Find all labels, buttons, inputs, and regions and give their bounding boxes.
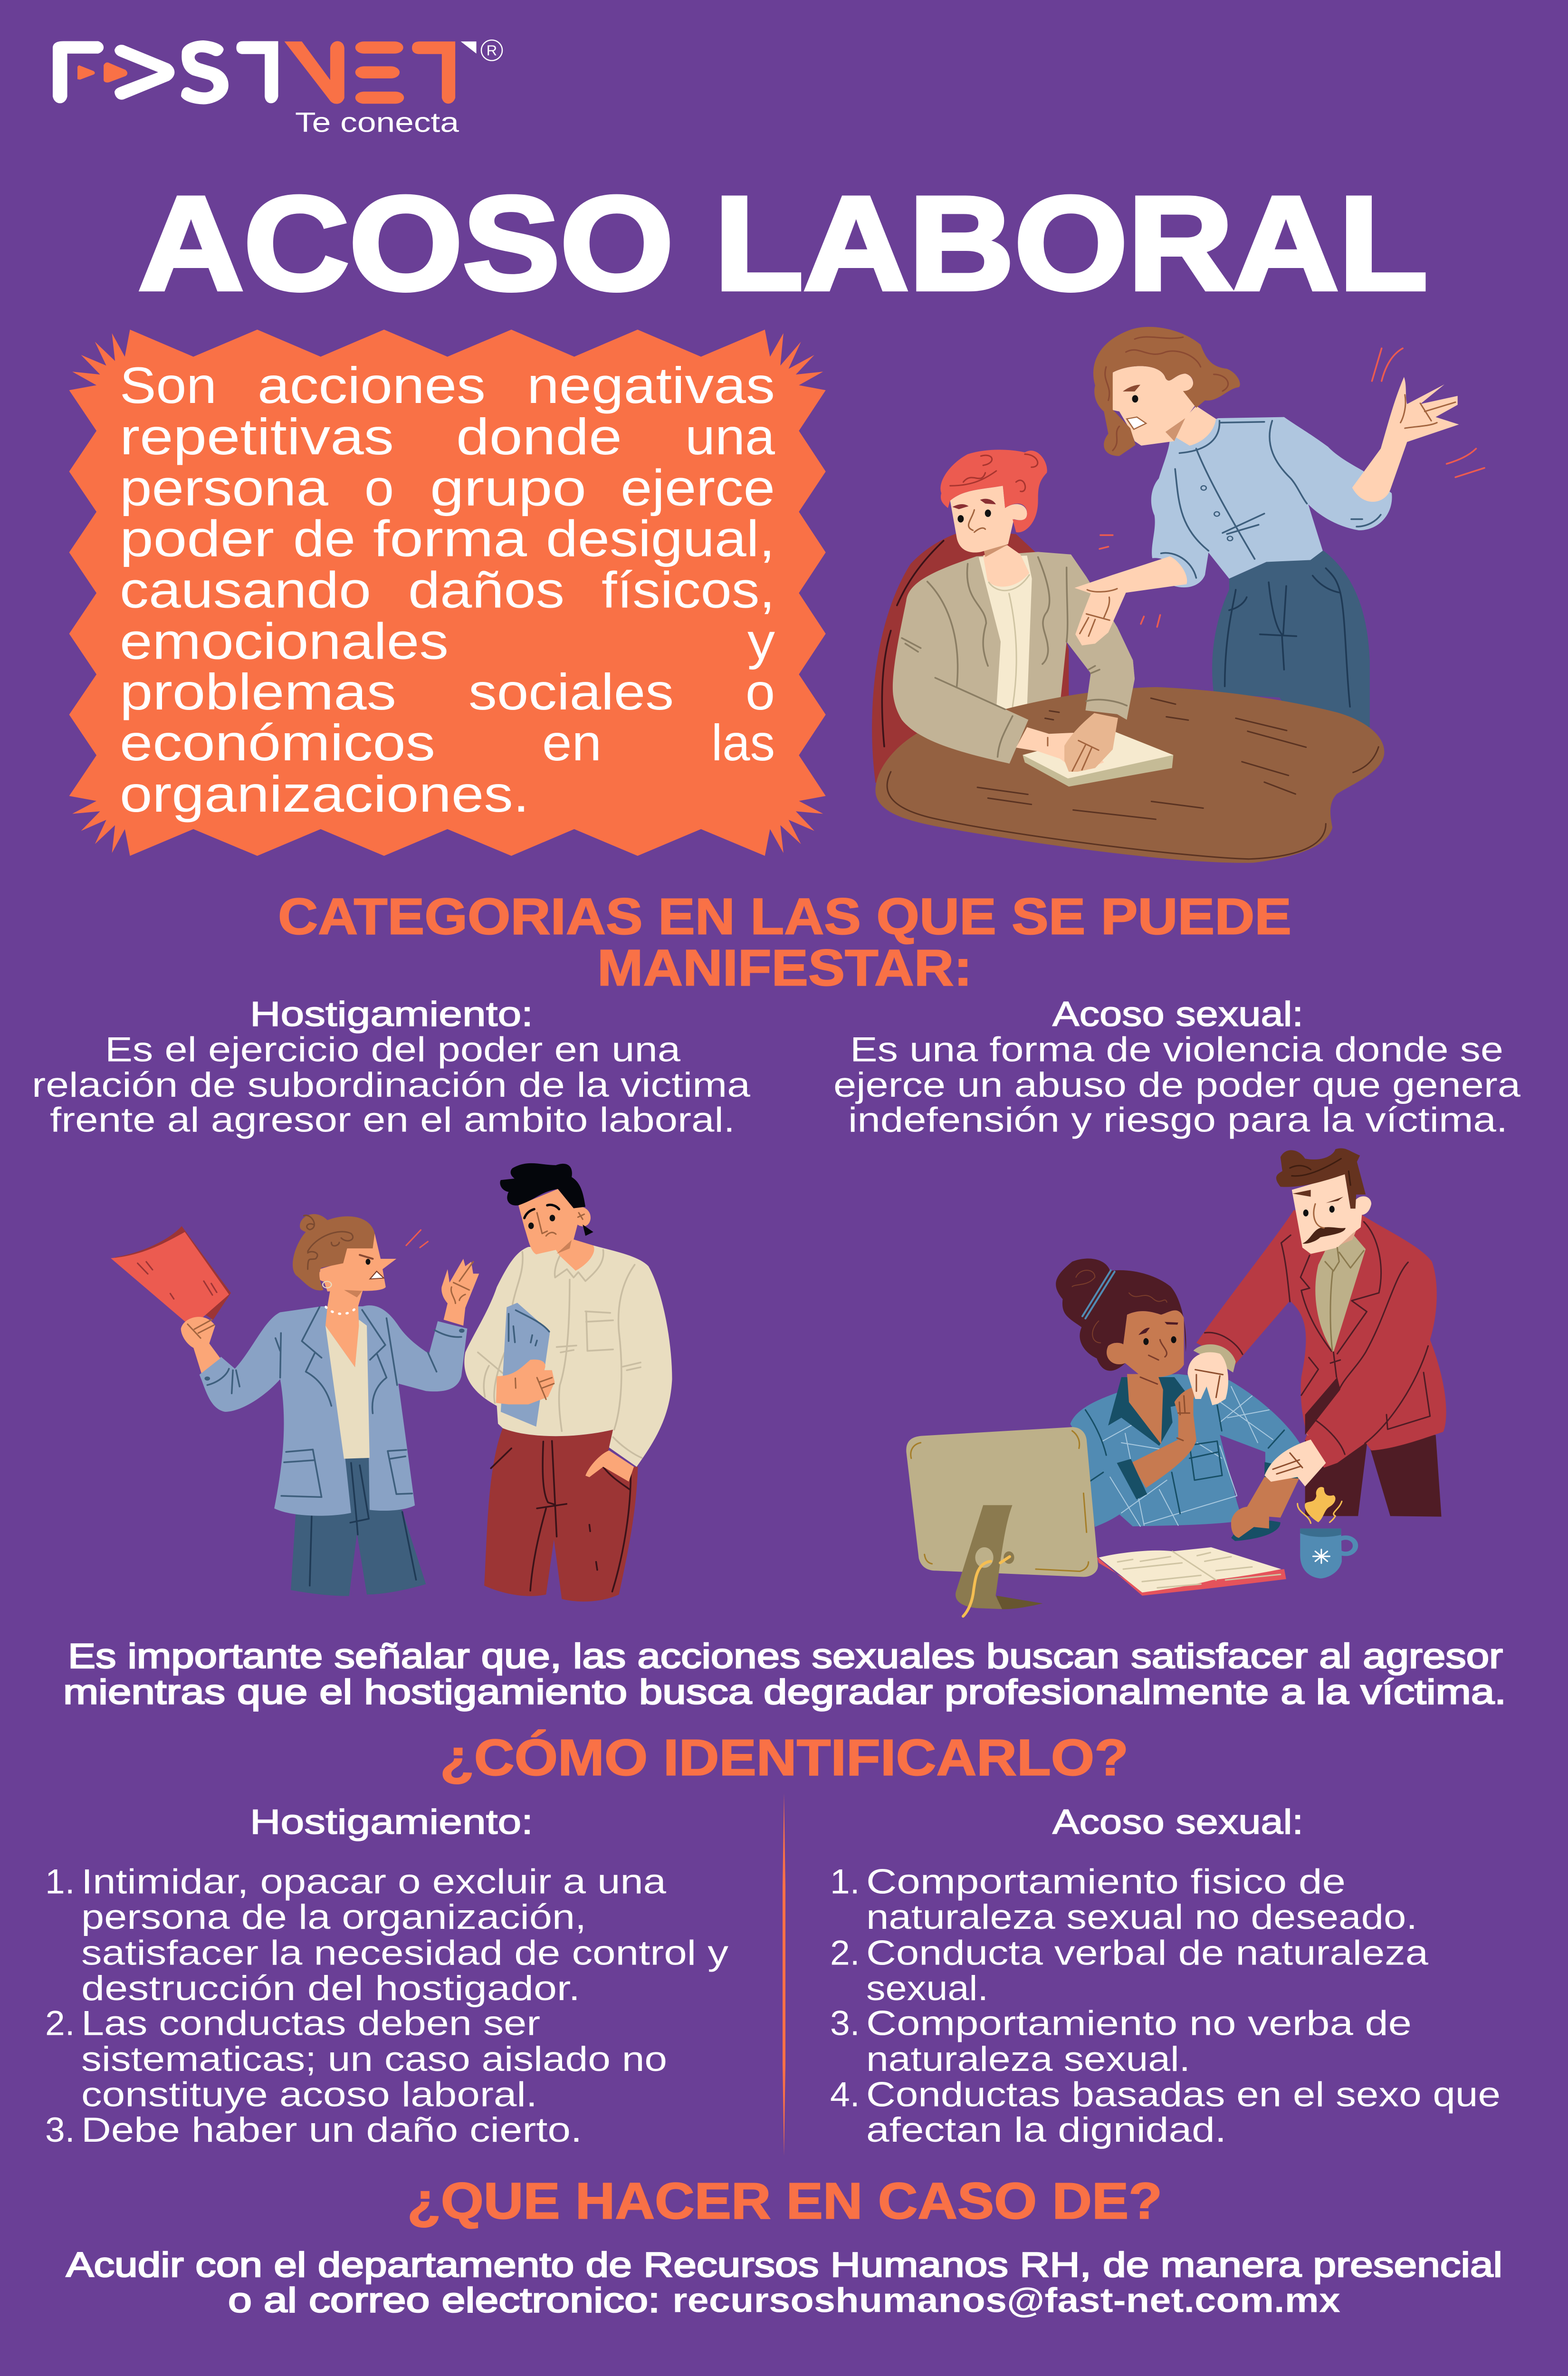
blouse and neck — [979, 545, 1032, 709]
illustration: woman scolding seated colleague at desk — [872, 327, 1484, 863]
definition text: problemas — [120, 663, 396, 721]
motion strokes — [1100, 348, 1484, 627]
definition text: o — [364, 460, 394, 517]
text block: hostigamiento definition: Hostigamiento: — [250, 994, 533, 1034]
definition text: Son — [120, 357, 217, 414]
woman trousers — [291, 1458, 426, 1596]
items: Conductas basadas en el sexo que — [866, 2075, 1501, 2114]
contact text — [66, 2245, 1502, 2320]
steam leaf — [1298, 1487, 1342, 1523]
items: sexual. — [866, 1968, 988, 2008]
definition text: físicos, — [602, 561, 775, 619]
text block: acoso sexual definition: indefensión y riesgo para la víctima. — [848, 1100, 1508, 1139]
collar — [1108, 1377, 1194, 1446]
hair — [1093, 327, 1240, 456]
palm lines — [1400, 395, 1455, 428]
definition text: y — [747, 613, 775, 670]
contact text: Acudir con el departamento de Recursos Humanos RH, de manera presencial — [66, 2245, 1502, 2284]
heading: what to do: ¿QUE HACER EN CASO DE? — [407, 2173, 1162, 2230]
items: naturaleza sexual. — [866, 2040, 1190, 2079]
items: 2. — [830, 1933, 860, 1972]
reaching arm — [1074, 556, 1187, 645]
items: constituye acoso laboral. — [81, 2075, 537, 2114]
head — [1110, 366, 1196, 446]
definition text: negativas — [527, 357, 775, 414]
blazer lines — [207, 1307, 461, 1497]
list: hostigamiento — [45, 1802, 728, 2149]
chair lines — [882, 541, 944, 747]
items — [830, 1862, 1501, 2149]
jacket lines — [1205, 1222, 1430, 1454]
items: 2. — [45, 2003, 75, 2042]
items: 1. — [830, 1862, 860, 1901]
desk grain — [887, 698, 1378, 859]
items: sistematicas; un caso aislado no — [81, 2040, 667, 2079]
woman raised arm — [1117, 1387, 1199, 1500]
definition text: económicos — [120, 714, 435, 772]
registered mark: R — [487, 42, 497, 59]
panel: definition burst — [69, 330, 826, 856]
logo mark — [53, 40, 477, 105]
man shirt — [1315, 1234, 1366, 1352]
man head — [1276, 1148, 1371, 1351]
man pocket hand — [585, 1450, 634, 1482]
text block: acoso sexual definition: ejerce un abuso de poder que genera — [833, 1065, 1521, 1104]
text block: hostigamiento definition: frente al agresor en el ambito laboral. — [50, 1100, 735, 1139]
man jacket — [1196, 1210, 1446, 1463]
jacket sleeves over desk — [893, 679, 1028, 764]
blouse and trouser lines — [1161, 421, 1381, 578]
heading: how to identify: ¿CÓMO IDENTIFICARLO? — [440, 1729, 1128, 1786]
trouser lines — [310, 1463, 416, 1586]
items: Conducta verbal de naturaleza — [866, 1933, 1429, 1972]
jacket lines — [902, 557, 1127, 757]
title: ACOSO LABORAL — [138, 169, 1428, 318]
tagline: Te conecta — [295, 106, 459, 138]
man upper hand — [1188, 1344, 1236, 1405]
items: 1. — [45, 1862, 75, 1901]
raised hand — [441, 1259, 479, 1326]
motion strokes — [406, 1230, 428, 1247]
monitor — [906, 1427, 1098, 1577]
man trousers — [1305, 1435, 1442, 1517]
man trousers — [484, 1428, 638, 1601]
seated person jacket — [893, 552, 1135, 764]
registered mark — [481, 40, 502, 60]
standing woman blouse — [1151, 417, 1392, 587]
items: naturaleza sexual no deseado. — [866, 1897, 1417, 1936]
items: destrucción del hostigador. — [81, 1968, 580, 2008]
items: 3. — [45, 2110, 75, 2149]
raised arm and hand — [1352, 377, 1459, 502]
items: afectan la dignidad. — [866, 2110, 1226, 2149]
items: Intimidar, opacar o excluir a una — [81, 1862, 667, 1901]
man shirt — [464, 1245, 672, 1467]
contact text: recursoshumanos@fast-net.com.mx — [672, 2280, 1340, 2320]
woman lower arm and mouse — [1231, 1462, 1306, 1541]
chest and neck — [325, 1290, 363, 1367]
shirt lines — [478, 1250, 642, 1458]
text block: acoso sexual definition — [833, 994, 1521, 1139]
items: persona de la organización, — [81, 1897, 586, 1936]
definition text: forma — [373, 510, 527, 567]
definition text: sociales — [468, 663, 674, 721]
items — [45, 1862, 728, 2149]
neck — [1127, 1374, 1163, 1444]
note: difference between behaviours: Es importante señalar que, las acciones sexuales buscan satisfacer al agresor — [68, 1636, 1503, 1676]
heading: categories: CATEGORIAS EN LAS QUE SE PUEDE — [278, 888, 1291, 945]
hair curls — [1105, 337, 1228, 450]
text block: hostigamiento definition: relación de subordinación de la victima — [32, 1065, 751, 1104]
note: difference between behaviours: mientras que el hostigamiento busca degradar profesionalmente a la víctima. — [63, 1672, 1506, 1711]
definition text: de — [293, 510, 355, 567]
heading: categories — [278, 888, 1291, 996]
heading: categories: MANIFESTAR: — [597, 939, 972, 996]
definition text: una — [685, 408, 775, 466]
definition text: grupo — [430, 460, 586, 517]
definition text: las — [711, 714, 775, 772]
woman shirt — [1070, 1374, 1303, 1527]
definition text: emocionales — [120, 613, 449, 670]
items: Las conductas deben ser — [81, 2003, 540, 2042]
items: 3. — [830, 2003, 860, 2042]
items: Comportamiento no verba de — [866, 2003, 1412, 2042]
contact text: o al correo electronico: — [228, 2280, 660, 2320]
definition text: daños — [408, 561, 564, 619]
definition text: ejerce — [621, 460, 775, 517]
logo: FastNet — [53, 40, 502, 138]
standing woman trousers — [1212, 551, 1370, 727]
subheading: Acoso sexual: — [1052, 1802, 1303, 1841]
hands on book — [1016, 727, 1104, 772]
book — [1023, 731, 1173, 786]
items: satisfacer la necesidad de control y — [81, 1933, 728, 1972]
man lower hand — [1264, 1433, 1337, 1486]
items: Debe haber un daño cierto. — [81, 2110, 582, 2149]
illustration: hostigamiento, angry woman and man — [111, 1163, 672, 1601]
woman face — [293, 1214, 396, 1297]
man head — [500, 1163, 594, 1271]
subheading: Hostigamiento: — [250, 1802, 533, 1841]
woman blouse — [325, 1320, 370, 1459]
items: 4. — [830, 2075, 860, 2114]
coffee mug — [1300, 1529, 1356, 1579]
woman head and hair — [1056, 1258, 1186, 1384]
definition text: persona — [120, 460, 328, 517]
necklace — [326, 1307, 356, 1314]
definition text — [120, 357, 775, 823]
text block: hostigamiento definition — [32, 994, 751, 1139]
definition text: causando — [120, 561, 371, 619]
text block: hostigamiento definition: Es el ejercicio del poder en una — [105, 1030, 681, 1069]
burst shape — [69, 330, 826, 856]
definition text: repetitivas — [120, 408, 394, 466]
red folder — [111, 1226, 231, 1327]
definition text: poder — [120, 510, 274, 567]
neck — [1170, 406, 1216, 446]
list: acoso sexual — [830, 1802, 1501, 2149]
column divider — [783, 1793, 785, 2156]
face details — [1123, 385, 1185, 441]
chair — [872, 530, 1069, 783]
note: difference between behaviours — [63, 1636, 1506, 1711]
text block: acoso sexual definition: Es una forma de violencia donde se — [850, 1030, 1503, 1069]
definition text: en — [542, 714, 602, 772]
shirt plaid — [1102, 1387, 1273, 1526]
definition text: o — [746, 663, 775, 721]
arm with folder — [181, 1317, 220, 1373]
inner dark panel — [1305, 1377, 1340, 1435]
desk — [875, 687, 1384, 863]
blue folder — [501, 1303, 550, 1427]
definition text: acciones — [258, 357, 486, 414]
items: Comportamiento fisico de — [866, 1862, 1346, 1901]
monitor stand — [956, 1505, 1042, 1616]
man hand — [496, 1360, 555, 1404]
open notebook — [1097, 1547, 1286, 1596]
definition text: organizaciones. — [120, 766, 529, 823]
text block: acoso sexual definition: Acoso sexual: — [1052, 994, 1303, 1034]
seated person head — [940, 450, 1047, 557]
definition text: donde — [456, 408, 622, 466]
definition text: desigual, — [546, 510, 775, 567]
illustration: acoso sexual, man leaning over woman at computer — [906, 1148, 1446, 1616]
woman blazer — [200, 1305, 467, 1516]
